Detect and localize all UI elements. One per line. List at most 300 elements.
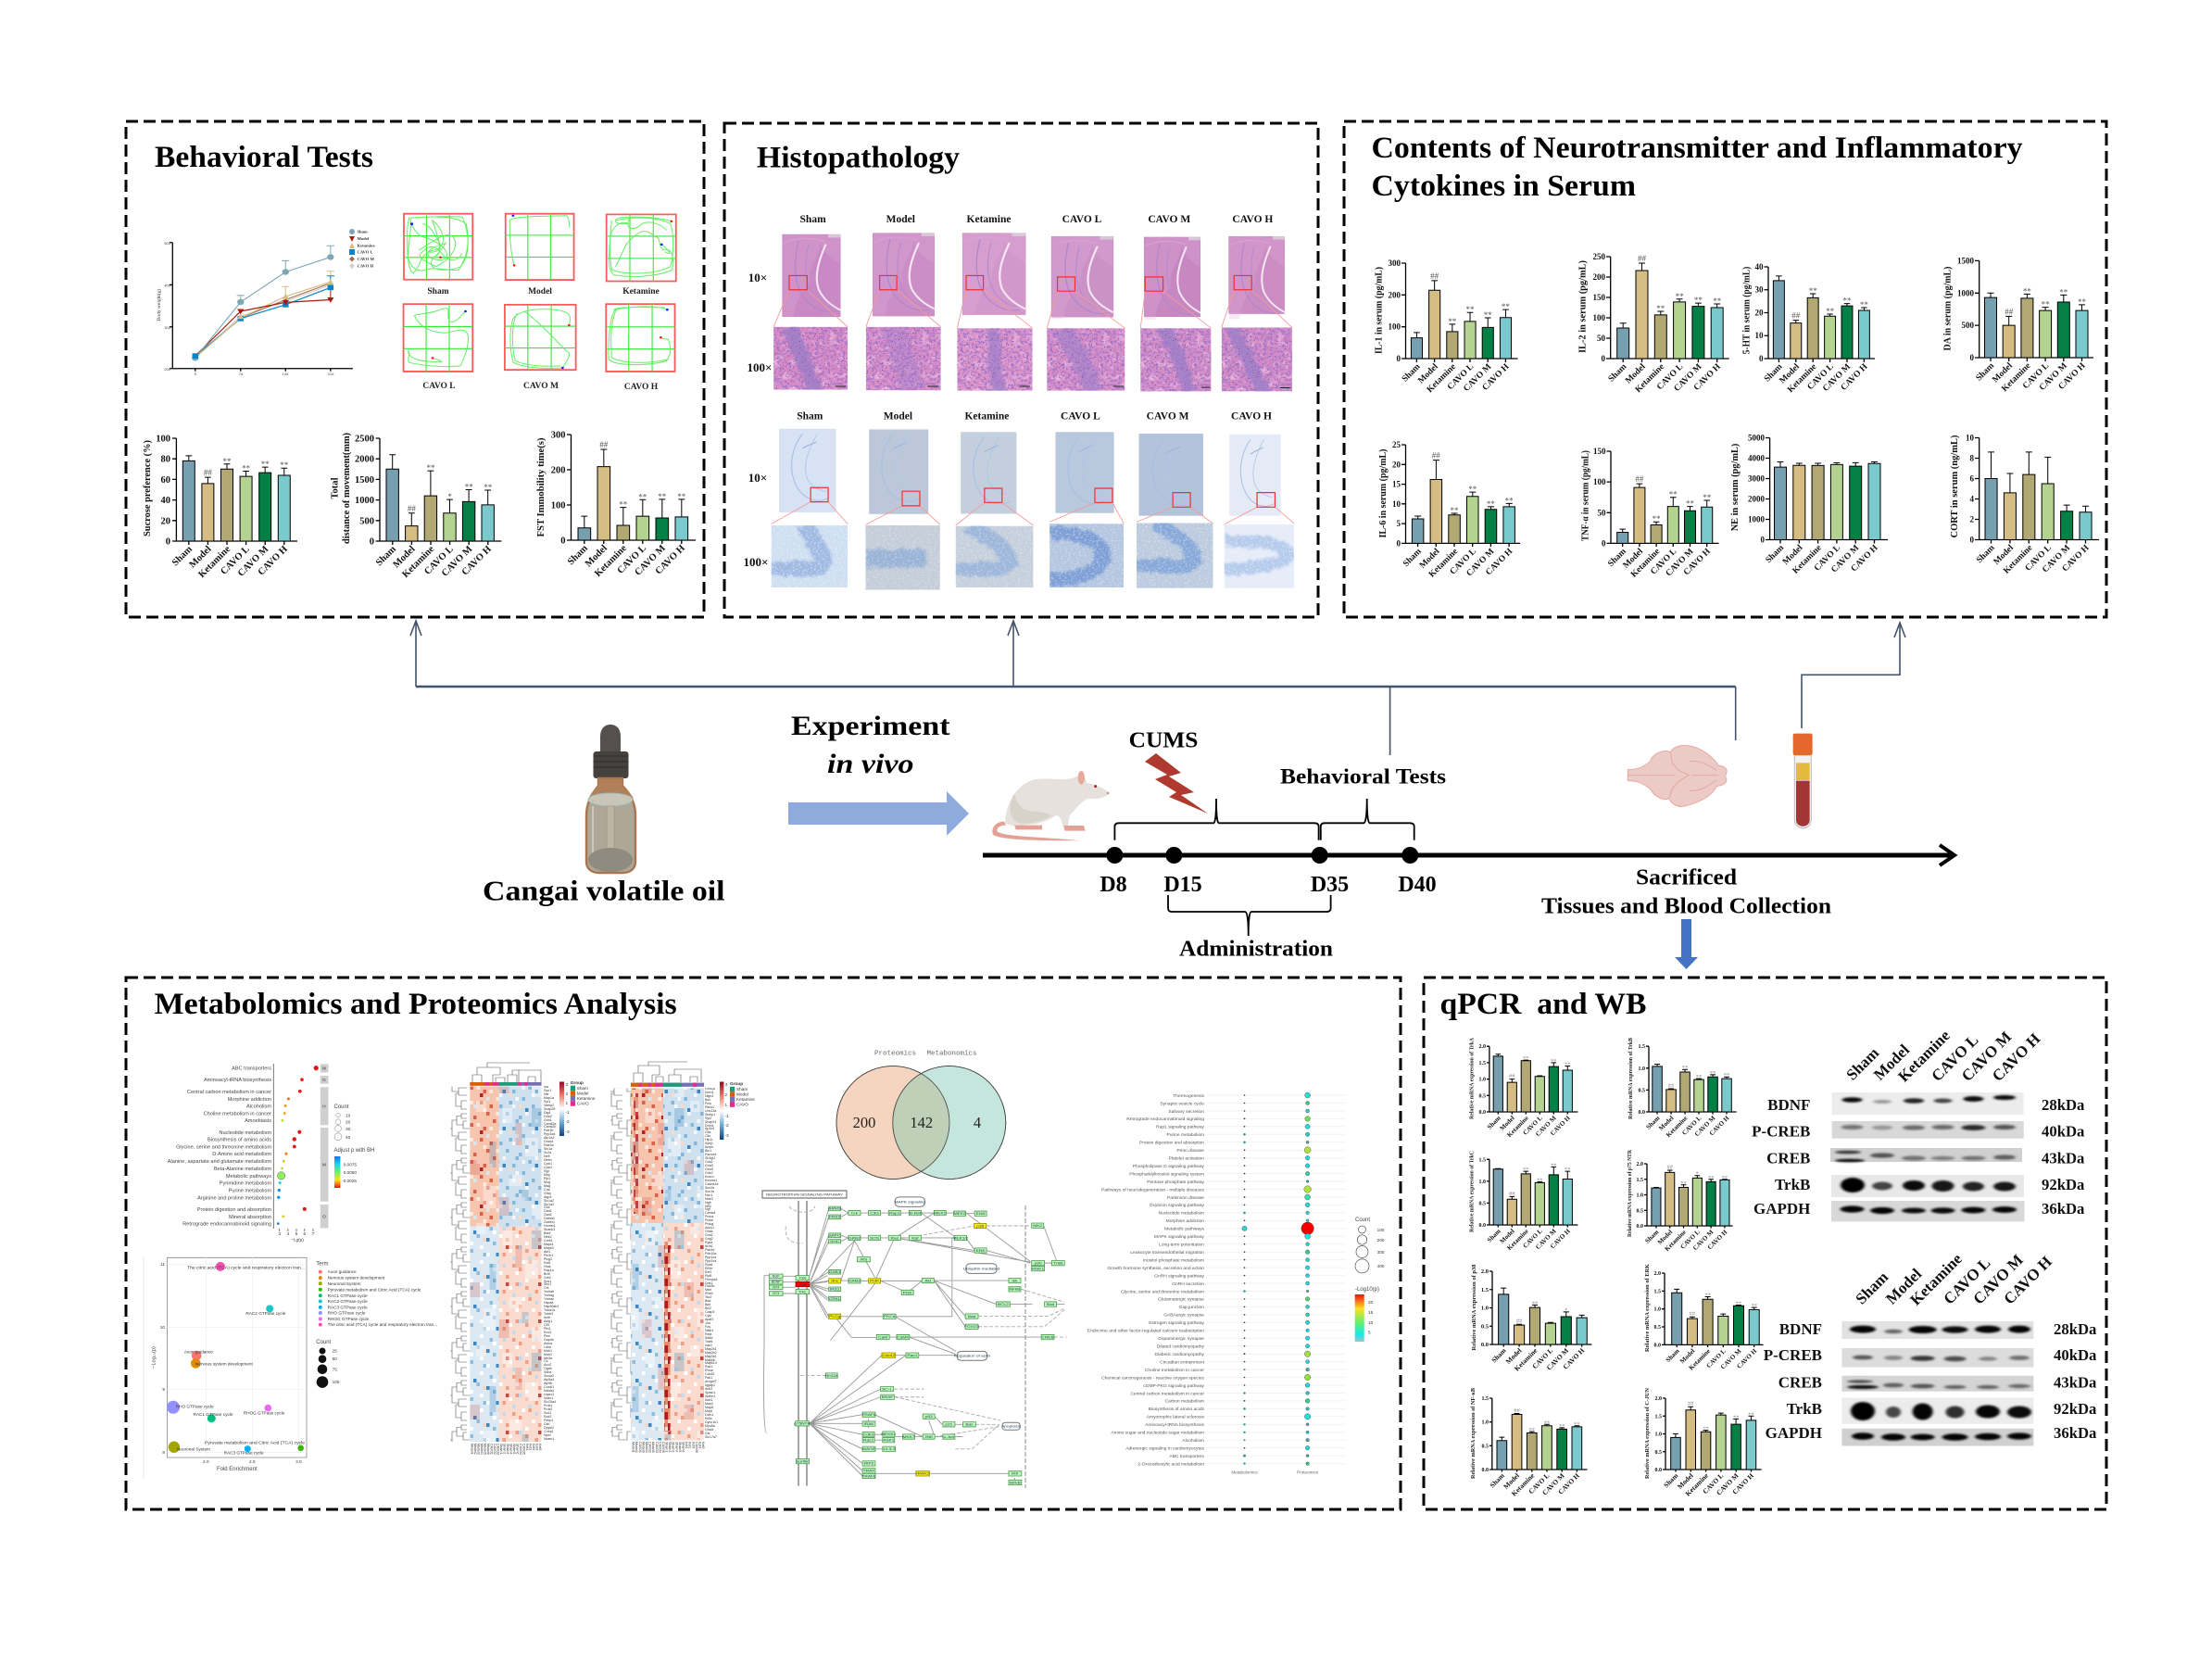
dot plot: KEGG pathway enrichment: Alcoholism — [246, 1104, 271, 1110]
left pathway inputs: NT4 — [773, 1285, 779, 1289]
heatmap sample labels: Sham2 — [668, 1442, 672, 1452]
heatmap row labels: Hsp90ab1 — [544, 1305, 559, 1308]
bubble chart: enrichment by term: The citric acid (TCA) cycle and respiratory electron tran... — [328, 1322, 437, 1327]
Nissl staining row: CAVO L — [1061, 411, 1100, 423]
heatmap row labels: Ywhaz — [544, 1297, 554, 1301]
pathway diagram: neurotrophin signaling pathway: MEKK1 — [881, 1432, 897, 1436]
pathway diagram: neurotrophin signaling pathway: B-Raf — [910, 1211, 922, 1215]
bar chart: DA — [1942, 256, 2093, 394]
heatmap row labels: Sv2a — [544, 1151, 551, 1155]
western blot: upper set: CAVO M — [1958, 1028, 2015, 1085]
dot plot: metabolomics and proteomics shared pathways: Chemical carcinogenesis - reactive oxygen species — [1101, 1375, 1205, 1381]
heatmap row labels: Gabbr1 — [544, 1220, 555, 1224]
bar chart: CORT: 10 — [1966, 434, 1975, 443]
heatmap row labels: Rhoa — [705, 1369, 713, 1372]
bar chart: NF-kB mRNA: 0.0 — [1482, 1468, 1489, 1473]
pathway diagram: neurotrophin signaling pathway: PDK — [903, 1291, 912, 1294]
bar chart: 5-HT: CAVO M — [1821, 362, 1853, 394]
heatmap row labels: Arhgef7 — [705, 1380, 717, 1383]
bar chart: sucrose preference: 40 — [161, 496, 170, 506]
pathway diagram: neurotrophin signaling pathway: MAGE — [862, 1447, 875, 1451]
bar chart: NE: 4000 — [1748, 454, 1766, 463]
dot plot: metabolomics and proteomics shared pathways: Amyotrophic lateral sclerosis — [1147, 1415, 1205, 1420]
bar chart: TrkB mRNA: 0.5 — [1638, 1088, 1645, 1093]
heatmap sample labels: Model2 — [635, 1442, 638, 1453]
bar chart: TrkA mRNA: Relative mRNA expression of TrkA — [1469, 1037, 1475, 1119]
dot plot: KEGG pathway enrichment: G — [322, 1078, 326, 1082]
bar chart: TrkA mRNA — [1469, 1037, 1577, 1139]
bubble chart: enrichment by term: RAC2 GTPase cycle — [245, 1311, 286, 1316]
bar chart: p38 mRNA: Sham — [1489, 1346, 1508, 1364]
panel: neurotransmitter and cytokine contents — [1344, 121, 2106, 617]
heatmap row labels: Ywhab — [544, 1290, 554, 1293]
dot plot: metabolomics and proteomics shared pathways: Protein digestion and absorption — [1139, 1141, 1204, 1146]
pathway diagram: neurotrophin signaling pathway: TRAF6 — [862, 1474, 876, 1478]
dot plot: metabolomics and proteomics shared pathways: Retrograde endocannabinoid signaling — [1126, 1117, 1204, 1122]
heatmap row labels: Mapk1 — [544, 1243, 554, 1246]
bar chart: IL-1: ** — [1502, 302, 1510, 311]
heatmap row labels: Mbp — [544, 1173, 550, 1177]
western blot: upper set: Ketamine — [1894, 1027, 1954, 1085]
heatmap row labels: Eef2 — [705, 1270, 711, 1274]
open field track plots: Model — [528, 287, 552, 297]
heatmap row labels: Ntrk3 — [705, 1197, 713, 1201]
heatmap legend: Group — [730, 1081, 743, 1086]
bar chart: total distance of movement: 1500 — [355, 475, 374, 486]
pathway diagram: neurotrophin signaling pathway: GRB2 — [848, 1236, 861, 1240]
heatmap row labels: Gapdh — [544, 1338, 554, 1342]
bar chart: NF-kB mRNA: 0.5 — [1482, 1444, 1489, 1449]
bar chart: TrkB mRNA: Sham — [1645, 1115, 1662, 1131]
dot plot: metabolomics and proteomics shared pathways: Gap junction — [1179, 1305, 1204, 1310]
bar chart: IL-1: 300 — [1388, 259, 1401, 268]
bar chart: sucrose preference: 20 — [161, 516, 170, 526]
heatmap row labels: Ap2a1 — [705, 1127, 714, 1130]
pathway diagram: neurotrophin signaling pathway: IKK — [1012, 1471, 1019, 1476]
bar chart: TrkB mRNA: ## — [1668, 1082, 1675, 1090]
bubble chart: enrichment by term: RAC3 GTPase cycle — [224, 1451, 264, 1456]
bubble chart: enrichment by term: RHO GTPase cycle — [176, 1404, 214, 1408]
heatmap sample labels: Model6 — [486, 1444, 490, 1455]
heatmap row labels: Glul — [544, 1205, 549, 1209]
bar chart: TrkB mRNA: 1.5 — [1638, 1044, 1645, 1050]
left pathway inputs: NGF — [773, 1274, 780, 1278]
pathway diagram: neurotrophin signaling pathway: BCL2 — [998, 1302, 1010, 1306]
heatmap legend: -3 — [724, 1133, 729, 1138]
pathway diagram: neurotrophin signaling pathway: TrkB — [1053, 1261, 1062, 1265]
bar chart: sucrose preference: Sucrose preference (%) — [143, 440, 153, 536]
heatmap row labels: Scn2a — [705, 1186, 714, 1190]
heading: qPCR and WB: qPCR and WB — [1439, 988, 1647, 1021]
bar chart: total distance of movement: Ketamine — [400, 544, 436, 580]
bar chart: TrkA mRNA: 1.0 — [1478, 1078, 1486, 1083]
bar chart: TNF-alpha: ## — [1635, 474, 1644, 484]
dot plot: metabolomics and proteomics shared pathways: Central carbon metabolism in cancer — [1130, 1391, 1204, 1396]
heatmap row labels: Crk — [544, 1286, 549, 1290]
bar chart: sucrose preference: Model — [188, 544, 214, 570]
dot plot: metabolomics and proteomics shared pathways: Estrogen signaling pathway — [1149, 1320, 1205, 1326]
line chart: body weight: 200 — [164, 367, 171, 372]
heatmap row labels: Vamp2 — [544, 1104, 554, 1107]
heatmap row labels: Map2 — [705, 1402, 713, 1406]
heatmap sample labels: Model4 — [645, 1442, 648, 1453]
heatmap row labels: Cacna1a — [705, 1182, 718, 1186]
heatmap row labels: Nlgn3 — [705, 1094, 713, 1098]
bar chart: TrkA mRNA: ** — [1565, 1061, 1571, 1067]
pathway diagram: neurotrophin signaling pathway: CaM — [878, 1335, 888, 1339]
bar chart: p38 mRNA: CAVO H — [1561, 1346, 1586, 1371]
bubble chart: enrichment by term: Term — [316, 1262, 329, 1268]
bar chart: CORT: CAVO H — [2061, 543, 2092, 574]
dot plot: metabolomics and proteomics shared pathways: Oxytocin signaling pathway — [1150, 1203, 1205, 1208]
dot plot: metabolomics and proteomics shared pathways: Amino sugar and nucleotide sugar metabolism — [1111, 1431, 1204, 1436]
heatmap row labels: Bad — [705, 1299, 710, 1303]
pathway diagram: neurotrophin signaling pathway: Bad — [968, 1314, 976, 1319]
western blot: lower set: TrkB — [1787, 1400, 1822, 1418]
heatmap row labels: Hcn1 — [705, 1193, 712, 1197]
dot plot legend: 15 — [1368, 1310, 1374, 1315]
western blot: upper set: P-CREB — [1752, 1123, 1810, 1140]
bar chart: TrkB mRNA — [1628, 1038, 1736, 1139]
heatmap legend: Sham — [577, 1086, 588, 1091]
heatmap row labels: Hip1r — [705, 1138, 713, 1142]
dot plot: KEGG pathway enrichment: Mineral absorption — [229, 1215, 271, 1220]
bar chart: NE: 1000 — [1748, 515, 1766, 524]
bar chart: NE: 3000 — [1748, 474, 1766, 484]
bar chart: IL-6: CAVO M — [1465, 547, 1497, 578]
dot plot: KEGG pathway enrichment: 0.0025 — [344, 1179, 357, 1183]
bar chart: IL-6: 10 — [1392, 499, 1401, 509]
bar chart: IL-6: ** — [1468, 485, 1477, 494]
bar chart: p75 NTR mRNA: Relative mRNA expression of p75 NTR — [1628, 1149, 1633, 1237]
pathway diagram: neurotrophin signaling pathway: Erk5 — [976, 1212, 986, 1216]
line chart: body weight: 21d — [328, 372, 333, 376]
bar chart: IL-2: Ketamine — [1634, 362, 1666, 395]
line chart: body weight: 500 — [164, 241, 171, 246]
bar chart: ERK mRNA: Model — [1678, 1347, 1696, 1365]
pathway diagram: neurotrophin signaling pathway: NEUROTROPHIN SIGNALING PATHWAY — [766, 1193, 844, 1197]
heatmap sample labels: CAVO4 — [519, 1444, 522, 1455]
heatmap row labels: Cdc42 — [705, 1372, 714, 1376]
heatmap row labels: Mapk3 — [544, 1246, 554, 1250]
bubble chart: enrichment by term: −Log₁₀(p) — [152, 1346, 157, 1369]
bar chart: p38 mRNA: * — [1565, 1307, 1567, 1314]
dot plot: KEGG pathway enrichment: Adjust p with BH — [333, 1148, 375, 1154]
pathway diagram: neurotrophin signaling pathway: p53 — [925, 1415, 933, 1419]
dot plot: KEGG pathway enrichment: Retrograde endocannabinoid signaling — [182, 1222, 271, 1228]
dot plot: metabolomics and proteomics shared pathways: Aminoacyl-tRNA biosynthesis — [1145, 1422, 1205, 1428]
line chart: body weight: 7d — [239, 372, 243, 376]
bar chart: NF-kB mRNA: Relative mRNA expression of NF-κB — [1471, 1388, 1477, 1479]
bar chart: IL-1: ** — [1484, 310, 1492, 320]
heatmap legend: 1 — [565, 1101, 569, 1105]
heatmap row labels: Gng2 — [705, 1237, 713, 1241]
venn diagram: proteomics and metabonomics: Metabonomics — [926, 1051, 977, 1058]
dot plot: KEGG pathway enrichment: 5 — [295, 1231, 298, 1236]
icon: lightning bolt for CUMS — [1145, 753, 1208, 814]
western blot: lower set: 92kDa — [2054, 1400, 2097, 1418]
bar chart: C-JUN mRNA: ## — [1688, 1401, 1694, 1407]
dot plot: metabolomics and proteomics shared pathways: Choline metabolism in cancer — [1145, 1368, 1204, 1373]
heatmap row labels: Prdx2 — [544, 1407, 552, 1411]
heatmap row labels: Casp3 — [705, 1310, 714, 1314]
bar chart: TrkA mRNA: Model — [1499, 1115, 1516, 1132]
heatmap row labels: Mapk8 — [705, 1358, 715, 1362]
heatmap legend: Ketamine — [577, 1096, 596, 1101]
pathway diagram: neurotrophin signaling pathway: Sortilin — [796, 1459, 810, 1463]
heatmap row labels: Sdha — [544, 1370, 551, 1374]
bar chart: NE — [1730, 434, 1888, 576]
western blot: lower set: BDNF — [1779, 1320, 1822, 1338]
bar chart: NF-kB mRNA: CAVO H — [1556, 1471, 1581, 1496]
heatmap row labels: Pfn2 — [544, 1327, 550, 1331]
heatmap row labels: Nrxn1 — [705, 1091, 714, 1094]
heatmap legend: 1 — [724, 1103, 728, 1107]
label: CUMS: CUMS — [1129, 729, 1198, 753]
dot plot: metabolomics and proteomics shared pathways: Circadian entrainment — [1160, 1359, 1205, 1365]
HE staining row: CAVO H — [1232, 214, 1273, 225]
heatmap row labels: Idh3a — [544, 1356, 552, 1360]
dot plot: KEGG pathway enrichment: M — [322, 1162, 326, 1167]
bar chart: CORT: Model — [1992, 543, 2016, 567]
legend: body weight groups: Ketamine — [358, 243, 375, 248]
pathway diagram: neurotrophin signaling pathway: Rap1 — [889, 1211, 900, 1215]
dot plot: metabolomics and proteomics shared pathways: Synaptic vesicle cycle — [1160, 1101, 1204, 1106]
bar chart: p38 mRNA: CAVO M — [1545, 1346, 1570, 1372]
pathway diagram: neurotrophin signaling pathway: GAB1 — [829, 1270, 841, 1274]
legend: body weight groups: Sham — [358, 230, 368, 233]
bar chart: 5-HT: Model — [1778, 362, 1802, 385]
western blot: upper set: 36kDa — [2042, 1200, 2085, 1218]
heatmap row labels: Ndufs1 — [544, 1389, 554, 1393]
heatmap row labels: Bdnf — [544, 1231, 550, 1235]
heatmap sample labels: Model1 — [632, 1442, 635, 1453]
heatmap sample labels: Ket3 — [532, 1444, 535, 1450]
pathway diagram: neurotrophin signaling pathway: SHC — [830, 1239, 839, 1243]
bar chart: TNF-alpha: TNF-α in serum (pg/mL) — [1580, 450, 1590, 541]
pathway diagram: neurotrophin signaling pathway: RIP2 — [864, 1461, 874, 1466]
heatmap row labels: Arrb1 — [705, 1244, 713, 1248]
bar chart: DA: Ketamine — [2000, 361, 2033, 394]
bubble chart: enrichment by term: RHOG GTPase cycle — [328, 1317, 370, 1321]
pathway diagram: neurotrophin signaling pathway: Bad — [1047, 1302, 1055, 1306]
bar chart: total distance of movement — [330, 433, 501, 580]
bubble chart: enrichment by term: Pyruvate metabolism and Citric Acid (TCA) cycle — [205, 1441, 305, 1445]
heatmap row labels: Gad2 — [544, 1213, 552, 1217]
heatmap row labels: Syp — [544, 1169, 549, 1173]
pathway diagram: neurotrophin signaling pathway: FOXO3 — [964, 1325, 980, 1329]
HE staining row: 10× — [748, 271, 767, 284]
pathway diagram: neurotrophin signaling pathway: ERK — [976, 1248, 986, 1253]
bar chart: FST immobility time: CAVO L — [616, 543, 648, 576]
dot plot: metabolomics and proteomics shared pathways: Growth hormone synthesis, secretion and action — [1107, 1266, 1204, 1271]
bar chart: DA: ** — [2078, 297, 2086, 307]
western blot: lower set: 43kDa — [2054, 1373, 2097, 1392]
heatmap row labels: Creb1 — [544, 1239, 553, 1243]
heatmap sample labels: CAVO1 — [489, 1444, 493, 1455]
dot plot: metabolomics and proteomics shared pathways: Metabolomics — [1231, 1470, 1258, 1475]
bar chart: p38 mRNA: 1.0 — [1481, 1305, 1489, 1312]
bar chart: TNF-alpha: ** — [1653, 514, 1661, 524]
heatmap sample labels: Model2 — [473, 1444, 477, 1455]
bar chart: NF-kB mRNA: CAVO L — [1527, 1471, 1551, 1495]
bar chart: TNF-alpha: 0 — [1602, 538, 1606, 548]
bar chart: p38 mRNA: Model — [1504, 1346, 1524, 1366]
heatmap row labels: Ppp3ca — [544, 1132, 555, 1136]
bar chart: ERK mRNA: Sham — [1665, 1347, 1681, 1364]
dot plot: metabolomics and proteomics shared pathways: Dopaminergic synapse — [1158, 1336, 1204, 1342]
pathway diagram: neurotrophin signaling pathway: Shc — [831, 1279, 838, 1283]
heatmap row labels: Raf1 — [544, 1261, 551, 1265]
pathway diagram: neurotrophin signaling pathway: Cdc42 — [882, 1354, 896, 1357]
bar chart: sucrose preference: CAVO L — [219, 544, 252, 577]
heatmap row labels: Atp5a1 — [544, 1378, 554, 1382]
heatmap sample labels: CAVO3 — [655, 1442, 659, 1453]
timeline with brackets: D8 — [1100, 873, 1127, 897]
heatmap row labels: Nsf — [544, 1092, 548, 1096]
bar chart: p75 NTR mRNA: Ketamine — [1664, 1229, 1688, 1253]
heatmap row labels: Pacsin1 — [705, 1153, 717, 1156]
bar chart: IL-6: Sham — [1401, 547, 1424, 569]
bar chart: TrkC mRNA: ** — [1523, 1167, 1529, 1173]
bar chart: DA: CAVO M — [2038, 361, 2069, 393]
bar chart: ERK mRNA: CAVO L — [1705, 1347, 1728, 1369]
bubble chart: enrichment by term: RHO GTPase cycle — [328, 1311, 366, 1316]
bar chart: NE: Ketamine — [1791, 544, 1824, 576]
pathway diagram: neurotrophin signaling pathway: IRAK2 — [916, 1471, 930, 1476]
dot plot: KEGG pathway enrichment: 4 — [287, 1231, 290, 1236]
heatmap sample labels: Model5 — [484, 1444, 487, 1455]
pathway diagram: neurotrophin signaling pathway: SC-1 — [882, 1387, 893, 1391]
bar chart: IL-6: 15 — [1392, 480, 1401, 489]
dot plot: metabolomics and proteomics shared pathways: MAPK signaling pathway — [1154, 1234, 1205, 1240]
label: administration: Administration — [1179, 938, 1333, 962]
heatmap row labels: Sos1 — [544, 1280, 551, 1283]
dot plot legend: 100 — [1377, 1228, 1385, 1232]
pathway diagram: neurotrophin signaling pathway: CREB — [1041, 1335, 1054, 1339]
bar chart: IL-6: ## — [1432, 451, 1440, 461]
bar chart: total distance of movement: 500 — [359, 516, 374, 526]
pathway diagram: neurotrophin signaling pathway: SOS — [870, 1236, 879, 1240]
bar chart: C-JUN mRNA: 0.0 — [1654, 1468, 1662, 1473]
heatmap row labels: Grm5 — [705, 1167, 713, 1171]
heatmap sample labels: Sham3 — [672, 1442, 675, 1452]
pathway diagram: neurotrophin signaling pathway: Raf — [911, 1236, 920, 1240]
bar chart: IL-2: CAVO H — [1692, 362, 1723, 393]
pathway diagram: neurotrophin signaling pathway: CdK2 — [863, 1432, 874, 1436]
Nissl staining row: Sham — [797, 411, 823, 423]
left pathway inputs: TrkB — [799, 1282, 807, 1286]
heatmap row labels: Rap1a — [544, 1268, 554, 1272]
bar chart: ERK mRNA: 2.0 — [1654, 1271, 1661, 1277]
dot plot: KEGG pathway enrichment: Metabolic pathways — [226, 1174, 271, 1180]
heatmap legend: Model — [736, 1091, 748, 1097]
western blot: lower set — [1764, 1250, 2097, 1445]
heatmap sample labels: CAVO5 — [522, 1444, 526, 1455]
heatmap row labels: Map2k1 — [705, 1347, 717, 1351]
heatmap row labels: Irak1 — [705, 1344, 712, 1347]
dot plot: metabolomics and proteomics shared pathways: Phospholipase D signaling pathway — [1133, 1164, 1205, 1169]
bar chart: ERK mRNA: ## — [1690, 1310, 1696, 1318]
bar chart: TrkC mRNA: Model — [1499, 1228, 1516, 1245]
pathway diagram: neurotrophin signaling pathway: Rac1 — [907, 1354, 918, 1357]
bar chart: TrkA mRNA: 1.5 — [1478, 1061, 1486, 1066]
bar chart: p38 mRNA: 0.0 — [1481, 1342, 1489, 1348]
heatmap row labels: Crmp1 — [544, 1430, 554, 1433]
heatmap sample labels: Ket1 — [525, 1444, 529, 1450]
bar chart: TrkA mRNA: ** — [1551, 1058, 1557, 1065]
icon: essential oil dropper bottle — [586, 725, 635, 873]
bar chart: 5-HT: 10 — [1754, 331, 1764, 340]
heatmap legend: -1 — [565, 1110, 570, 1115]
dot plot: KEGG pathway enrichment: Alanine, aspartate and glutamate metabolism — [168, 1159, 271, 1165]
heatmap row labels: Aldoa — [544, 1342, 552, 1345]
bar chart: TrkB mRNA: ** — [1696, 1074, 1702, 1080]
dot plot: metabolomics and proteomics shared pathways: Long-term potentiation — [1159, 1242, 1204, 1247]
pathway diagram: neurotrophin signaling pathway: p38 — [976, 1224, 985, 1228]
heatmap row labels: Nptn — [544, 1433, 551, 1437]
heatmap sample labels: Ket2 — [688, 1442, 692, 1448]
heatmap sample labels: CAVO2 — [493, 1444, 496, 1455]
bar chart: total distance of movement: Sham — [374, 544, 398, 568]
heatmap sample labels: CAVO4 — [658, 1442, 661, 1453]
heatmap row labels: Hnrnpa1 — [705, 1278, 718, 1281]
heatmap legend: 2 — [565, 1091, 569, 1096]
heatmap row labels: Gfap — [544, 1192, 551, 1195]
bar chart: IL-1: CAVO L — [1446, 362, 1476, 392]
bar chart: p75 NTR mRNA: ** — [1708, 1175, 1714, 1181]
heatmap row labels: Ywhag — [544, 1293, 554, 1297]
pathway diagram: neurotrophin signaling pathway: RHOA — [825, 1373, 838, 1378]
western blot: lower set: 36kDa — [2054, 1424, 2097, 1442]
bar chart: FST immobility time: FST Immobility time(s) — [536, 437, 547, 537]
heatmap sample labels: Sham1 — [499, 1444, 503, 1454]
bar chart: ERK mRNA: 0.5 — [1654, 1325, 1661, 1331]
bar chart: IL-1: 200 — [1388, 290, 1401, 299]
pathway diagram: neurotrophin signaling pathway: IRS — [860, 1257, 868, 1261]
left pathway inputs: TrkA — [799, 1276, 807, 1280]
pathway diagram: neurotrophin signaling pathway: Ubiquitin mediated — [963, 1267, 1000, 1270]
dot plot: metabolomics and proteomics shared pathways: Pentose phosphate pathway — [1147, 1180, 1205, 1185]
heatmap row labels: Homer1 — [544, 1224, 556, 1228]
pathway diagram: neurotrophin signaling pathway: MSK1 — [1032, 1267, 1045, 1270]
dot plot legend — [1355, 1218, 1385, 1342]
bar chart: sucrose preference: 100 — [156, 434, 170, 445]
bar chart: CORT: 6 — [1969, 474, 1975, 484]
western blot: upper set: BDNF — [1767, 1096, 1810, 1114]
bar chart: total distance of movement: 2500 — [355, 434, 374, 445]
dot plot: metabolomics and proteomics shared pathways: Alcoholism — [1182, 1438, 1204, 1444]
dot plot: metabolomics and proteomics shared pathways: Platelet activation — [1169, 1156, 1204, 1162]
heatmap row labels: Rgs4 — [705, 1241, 712, 1244]
venn diagram: proteomics and metabonomics — [836, 1051, 1006, 1179]
heatmap row labels: Pclo — [705, 1102, 711, 1105]
legend: body weight groups: Model — [358, 236, 370, 241]
pathway diagram: neurotrophin signaling pathway: Rac1 — [863, 1438, 874, 1442]
heatmap row labels: Ddx1 — [705, 1281, 712, 1285]
dot plot: KEGG pathway enrichment: Morphine addiction — [228, 1097, 271, 1103]
heatmap sample labels: CAVO6 — [695, 1442, 698, 1453]
heatmap sample labels: CAVO2 — [648, 1442, 652, 1453]
heatmap sample labels: Ket5 — [538, 1444, 542, 1450]
bar chart: IL-6: Model — [1418, 547, 1442, 571]
dot plot: metabolomics and proteomics shared pathways: 2-Oxocarboxylic acid metabolism — [1137, 1461, 1204, 1467]
bar chart: ERK mRNA — [1645, 1263, 1764, 1371]
bar chart: IL-1: IL-1 in serum (pg/mL) — [1375, 267, 1384, 354]
dot plot: KEGG pathway enrichment: Central carbon metabolism in cancer — [187, 1090, 271, 1095]
heatmap row labels: Actg1 — [544, 1319, 552, 1323]
dot plot: KEGG pathway enrichment: 20 — [346, 1120, 351, 1125]
